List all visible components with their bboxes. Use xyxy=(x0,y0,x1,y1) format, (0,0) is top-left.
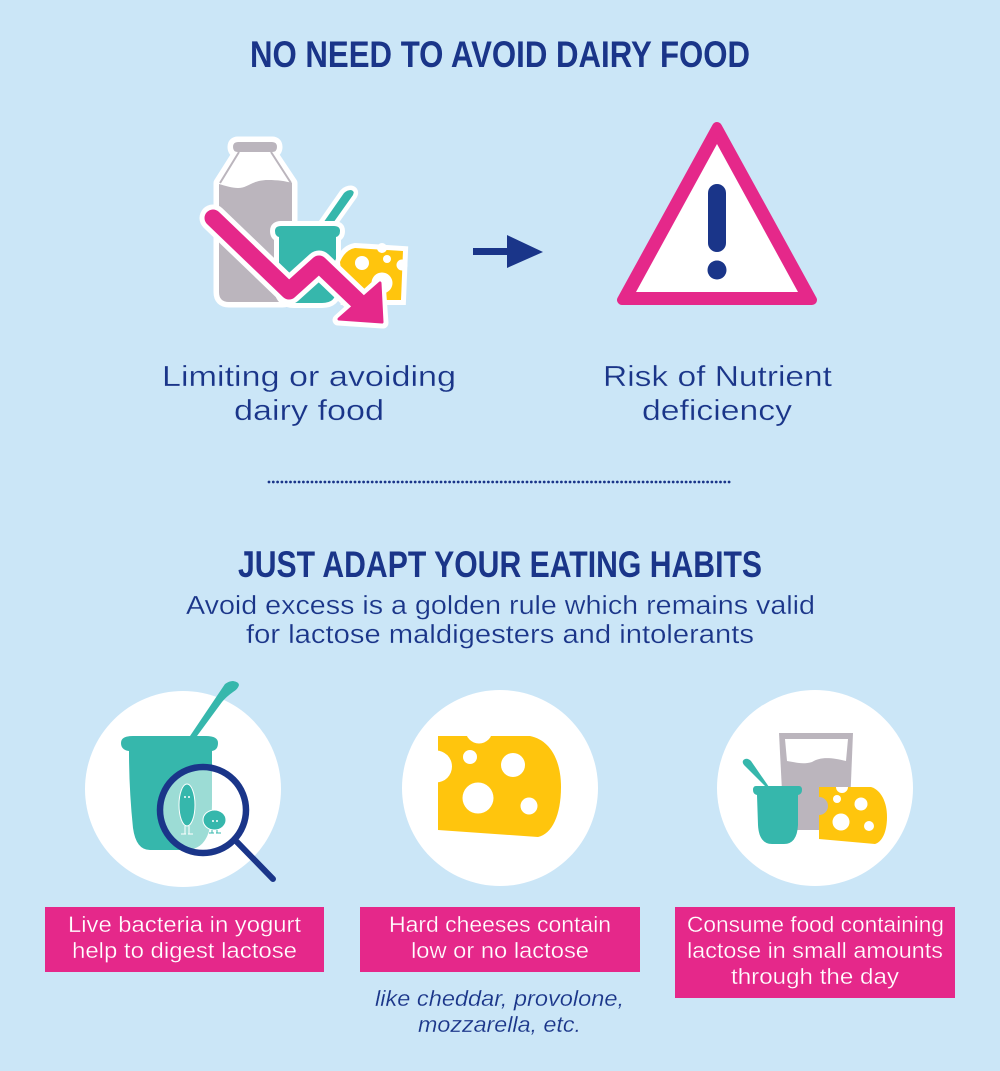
icon: magnifying glass xyxy=(160,767,273,879)
icon: small cheese xyxy=(819,787,887,844)
callout: live bacteria in yogurt xyxy=(45,907,324,972)
icon: downward pink arrow xyxy=(213,218,383,323)
callout: small amounts through the day: lactose in small amounts xyxy=(687,938,943,963)
callout: hard cheeses xyxy=(360,907,640,972)
text: limiting or avoiding dairy food: dairy food xyxy=(234,395,384,427)
heading: just adapt your eating habits: JUST ADAPT YOUR EATING HABITS xyxy=(238,543,762,585)
callout: small amounts through the day xyxy=(675,907,955,998)
icon: hard cheese xyxy=(402,690,598,886)
icon: yogurt under magnifier xyxy=(85,681,281,887)
text: golden rule subtitle: Avoid excess is a golden rule which remains valid xyxy=(186,592,815,620)
callout: live bacteria in yogurt: help to digest lactose xyxy=(72,938,297,963)
icon: glass of milk xyxy=(779,733,853,830)
text: limiting or avoiding dairy food xyxy=(162,361,456,427)
icon: milk bottle xyxy=(219,142,292,302)
callout: live bacteria in yogurt: Live bacteria in yogurt xyxy=(68,912,301,937)
text: risk of nutrient deficiency: deficiency xyxy=(642,395,793,427)
icon: cheese wedge xyxy=(340,243,408,300)
icon: warning triangle xyxy=(622,127,812,300)
callout: small amounts through the day: Consume food containing xyxy=(687,912,944,937)
note: cheese examples xyxy=(375,986,624,1037)
title: no need to avoid dairy food: NO NEED TO AVOID DAIRY FOOD xyxy=(250,33,750,75)
note: cheese examples: like cheddar, provolone, xyxy=(375,986,624,1011)
text: golden rule subtitle xyxy=(186,592,815,649)
arrow: leads to risk xyxy=(473,235,543,268)
icon: small portions of milk, yogurt and cheese xyxy=(717,690,913,886)
icon: dairy foods with falling arrow xyxy=(213,142,408,323)
note: cheese examples: mozzarella, etc. xyxy=(418,1012,581,1037)
callout: hard cheeses: low or no lactose xyxy=(411,938,589,963)
icon: small yogurt xyxy=(743,759,802,844)
text: risk of nutrient deficiency: Risk of Nutrient xyxy=(603,361,832,393)
callout: small amounts through the day: through the day xyxy=(731,964,899,989)
icon: long bacterium xyxy=(179,784,195,834)
callout: hard cheeses: Hard cheeses contain xyxy=(389,912,611,937)
text: limiting or avoiding dairy food: Limiting or avoiding xyxy=(162,361,456,393)
icon: yogurt pot with spoon xyxy=(275,190,354,303)
text: risk of nutrient deficiency xyxy=(603,361,832,427)
text: golden rule subtitle: for lactose maldigesters and intolerants xyxy=(246,621,754,649)
icon: round bacterium xyxy=(203,810,226,833)
